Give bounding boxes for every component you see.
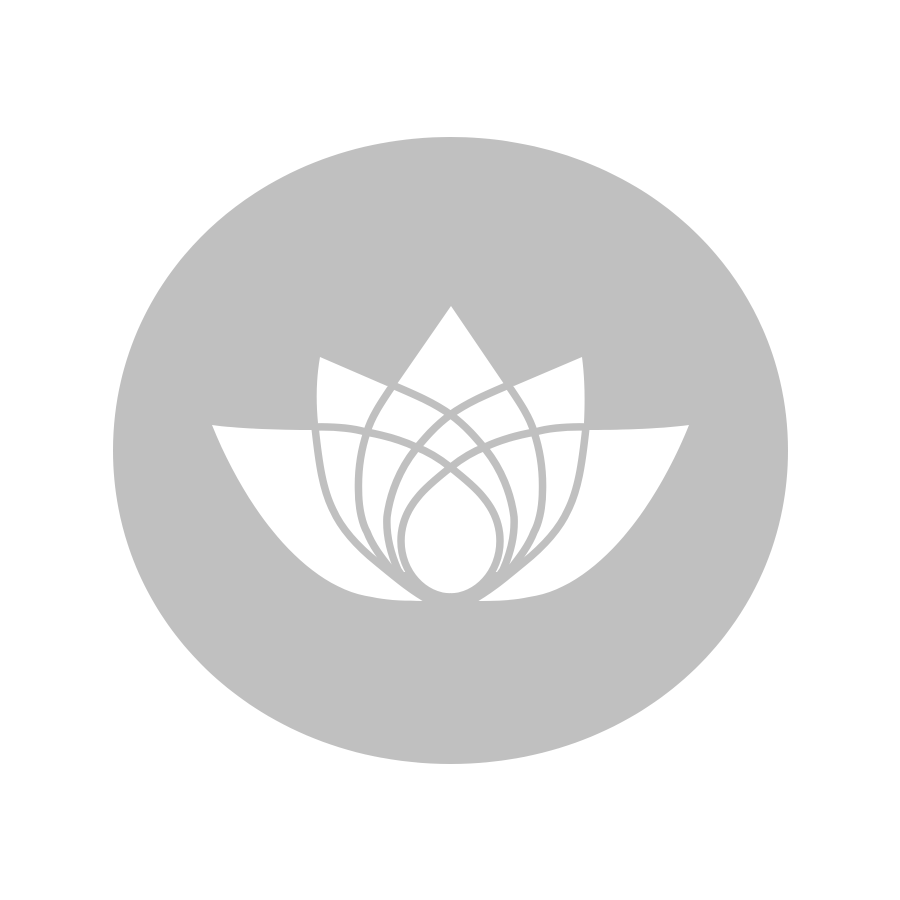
left outer petal line (315, 427, 430, 601)
petal outlines (315, 384, 586, 601)
right outer petal line (471, 427, 586, 601)
left second petal line (358, 385, 396, 576)
right second petal line (505, 385, 543, 576)
third petal line rising left (390, 384, 514, 588)
lotus silhouette (212, 306, 689, 601)
third petal line rising right (387, 384, 511, 588)
icon: white lotus flower (212, 306, 689, 602)
inner teardrop line from left (315, 427, 500, 597)
inner teardrop line from right (401, 427, 586, 597)
base wedge (378, 563, 523, 602)
background disc (113, 137, 788, 764)
